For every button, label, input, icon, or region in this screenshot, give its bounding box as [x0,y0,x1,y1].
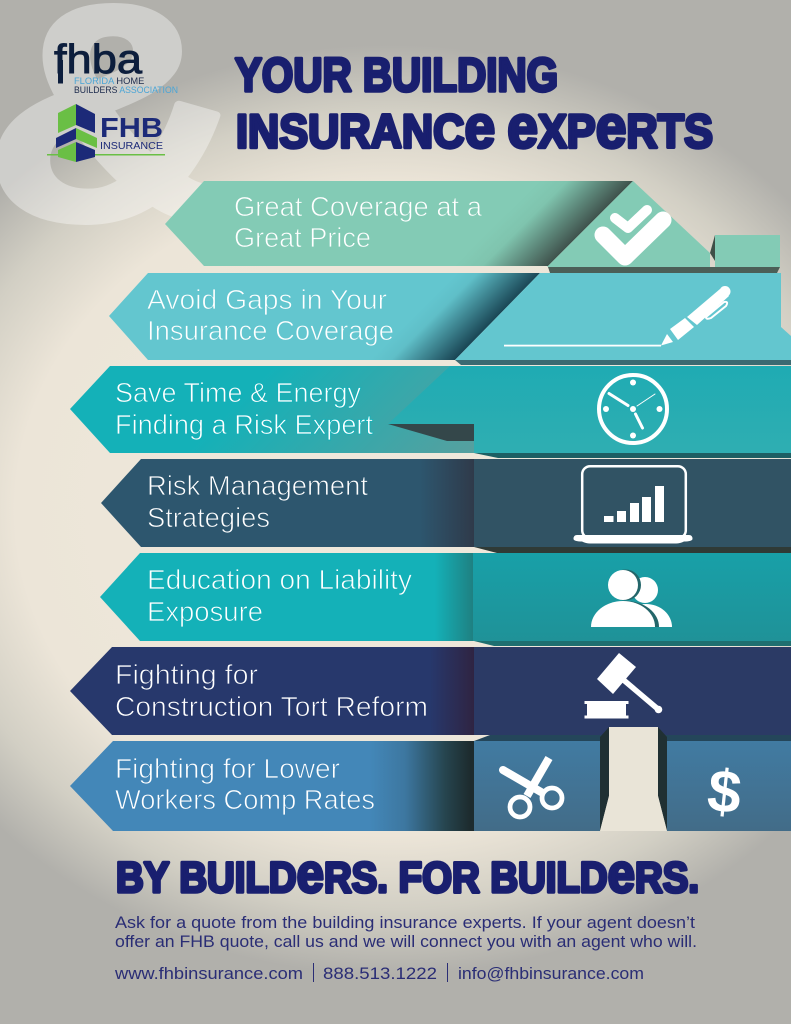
label text: Fighting for [115,659,258,690]
contact details: 888.513.1222 [323,964,437,983]
call to action paragraph: offer an FHB quote, call us and we will connect you with an agent who will. [115,932,697,951]
label text: Workers Comp Rates [115,784,375,815]
contact details: www.fhbinsurance.com [114,964,303,983]
logo: FHB Insurance: INSURANCE [100,140,163,152]
roof section [455,273,791,365]
label text [234,191,483,253]
panel [473,553,791,646]
label text: Risk Management [147,470,368,501]
label text: Fighting for Lower [115,753,340,784]
panel [474,647,791,741]
contact details [114,963,644,983]
label text: Construction Tort Reform [115,691,428,722]
logo: Florida Home Builders Association: fhba [54,36,142,82]
icon: people [591,570,672,627]
label text [115,377,373,440]
title: INSURANCe eXPeRTS [236,94,713,160]
label text [115,753,375,815]
logo: FHB Insurance: FHB [100,112,163,143]
label text: Great Coverage at a [234,191,483,222]
label text: Strategies [147,502,270,533]
logo: Florida Home Builders Association: BUILDERS ASSOCIATION [74,85,178,95]
label text [115,659,428,722]
label text: Education on Liability [147,564,412,595]
ribbon 3: save time [70,366,791,458]
icon: scissors [503,758,562,817]
label text [147,470,368,533]
title: YOUR BUILDING [235,48,558,101]
title [235,48,713,160]
panel [388,366,791,458]
ribbon 1: great coverage [165,181,780,273]
label text [147,284,394,346]
label text: Great Price [234,222,371,253]
icon: clock [599,375,667,443]
house roof and chimney [547,181,780,273]
icon: dollar sign: $ [704,757,745,827]
icon: laptop with bar chart [574,466,692,544]
panel [474,459,791,553]
label text: Insurance Coverage [147,315,394,346]
ribbon 7: workers comp [70,727,791,831]
label text: Exposure [147,596,263,627]
ribbon 5: education [100,553,791,646]
logo: Florida Home Builders Association: FLORIDA HOME [74,76,144,86]
icon: pen signing a line [504,286,730,346]
call to action paragraph [115,913,697,951]
logo: Florida Home Builders Association [54,36,178,95]
tagline: BY BUILDeRS. FOR BUILDeRS. [116,842,699,904]
label text: Avoid Gaps in Your [147,284,387,315]
label text [147,564,412,627]
label text: Save Time & Energy [115,377,361,408]
icon: double check mark [603,210,663,257]
ribbon 4: risk management [101,459,791,553]
icon: gavel [584,653,662,718]
panel with door cutout [474,727,791,831]
ribbon 2: avoid gaps [109,273,791,365]
label text: Finding a Risk Expert [115,409,373,440]
contact details: info@fhbinsurance.com [458,964,644,983]
ribbon 6: tort reform [70,647,791,741]
logo: FHB Insurance [47,104,165,162]
call to action paragraph: Ask for a quote from the building insurance experts. If your agent doesn’t [115,913,695,932]
